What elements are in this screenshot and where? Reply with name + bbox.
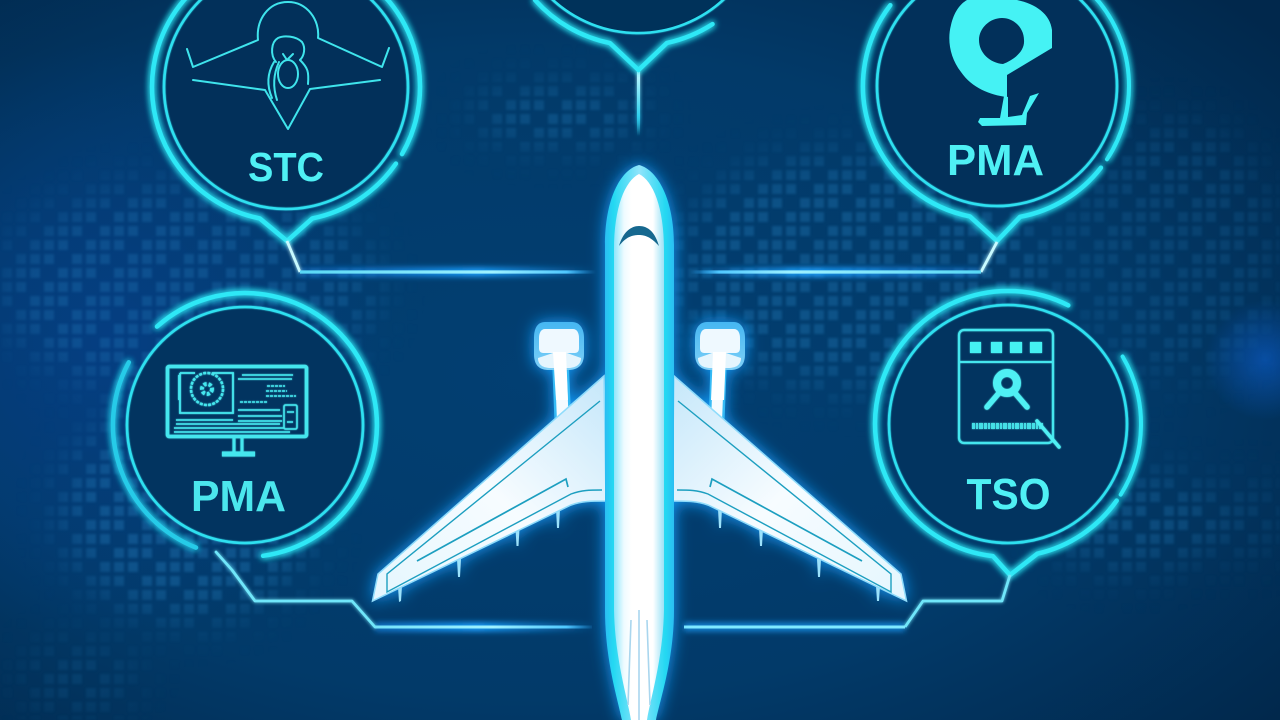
panel: TSO badge lower right (875, 291, 1141, 575)
panel: PMA badge lower left (113, 293, 377, 556)
wing: left (372, 376, 606, 601)
connector: top centre stem (637, 70, 640, 136)
fuselage (605, 165, 674, 720)
label: STC: STC (248, 144, 324, 190)
connector: TSO badge to aircraft (684, 575, 1010, 627)
label: PMA: PMA (947, 136, 1044, 185)
connector: STC badge to aircraft (287, 241, 596, 272)
icon: solid ring with stand (949, 0, 1052, 97)
icon: aircraft with bird outline (187, 2, 389, 129)
engine: right (695, 322, 745, 428)
label: PMA: PMA (191, 472, 286, 521)
panel: PMA badge top right (863, 0, 1129, 241)
icon: ring stand foot (978, 93, 1039, 126)
central aircraft illustration (372, 165, 906, 720)
panel: top centre badge (512, 0, 764, 70)
connector: left PMA badge to aircraft (216, 552, 592, 627)
wing: right (672, 376, 906, 601)
icon: monitor with diagram (168, 366, 306, 454)
label: TSO: TSO (966, 470, 1050, 519)
connector: right PMA badge to aircraft (690, 242, 997, 272)
cockpit windshield (619, 226, 659, 246)
engine: left (534, 322, 584, 428)
panel: STC certificate badge (152, 0, 420, 241)
icon: tool window document (959, 330, 1059, 447)
flap fairings (398, 508, 880, 602)
